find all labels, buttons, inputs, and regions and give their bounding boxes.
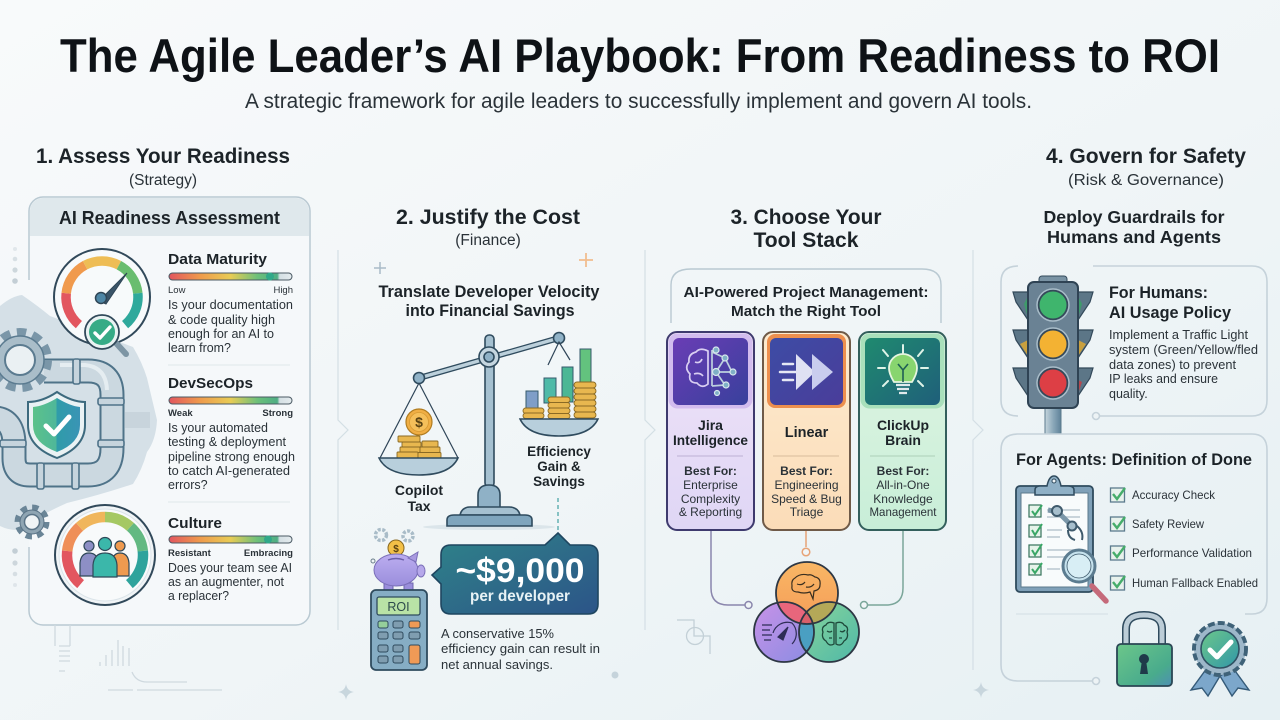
icon: piggy bank: $ — [393, 544, 399, 555]
left pan: copilot tax: Copilot — [395, 482, 443, 498]
icon: speedometer (left) — [762, 622, 796, 644]
left pan: copilot tax — [379, 383, 458, 514]
block: data maturity — [168, 252, 293, 355]
card: Jira Intelligence: Best For: — [684, 464, 737, 478]
block: devsecops — [168, 376, 295, 492]
block: data maturity: enough for an AI to — [168, 327, 274, 341]
block: devsecops: Strong — [262, 408, 293, 419]
checklist: Human Fallback Enabled — [1132, 576, 1258, 590]
panel header: AI Readiness Assessment — [59, 207, 280, 228]
subtitle: A strategic framework for agile leaders to successfully implement and govern AI tools. — [245, 90, 1032, 113]
right pan: efficiency gain: Efficiency — [527, 444, 591, 459]
block: devsecops: DevSecOps — [168, 376, 253, 392]
section 3 heading — [730, 206, 882, 252]
venn diagram — [754, 562, 859, 662]
block: culture: Resistant — [168, 548, 212, 559]
icon: traffic light — [1013, 276, 1093, 434]
card: ClickUp Brain: Brain — [885, 432, 921, 448]
section 4 heading — [1046, 145, 1246, 189]
robot arm — [1048, 506, 1082, 540]
icon: quality badge — [1191, 623, 1249, 696]
icon: AI brain network — [687, 347, 736, 396]
block: devsecops: pipeline strong enough — [168, 450, 295, 464]
panel: for humans — [1001, 266, 1267, 434]
callout: per developer savings — [432, 533, 598, 614]
card: Linear: Engineering — [774, 478, 839, 492]
savings note: efficiency gain can result in — [441, 641, 600, 656]
section 4 subheading: Deploy Guardrails for — [1044, 207, 1225, 227]
icon: ROI calculator — [371, 590, 427, 670]
right pan: efficiency gain: Gain & — [537, 459, 581, 474]
savings note — [441, 626, 600, 672]
section 1 heading: 1. Assess Your Readiness — [36, 145, 290, 168]
panel: for agents — [1001, 434, 1267, 684]
block: data maturity: Data Maturity — [168, 252, 267, 268]
section 1 heading: (Strategy) — [129, 172, 197, 189]
pipeline — [0, 365, 150, 475]
card: Linear: Best For: — [780, 464, 833, 478]
text: AI usage policy: quality. — [1109, 387, 1148, 401]
card: Jira Intelligence: Enterprise — [683, 478, 738, 492]
section 4 heading: 4. Govern for Safety — [1046, 145, 1246, 168]
checklist: Safety Review — [1132, 517, 1204, 531]
card: Linear — [763, 332, 850, 530]
card: ClickUp Brain: All-in-One — [876, 478, 930, 492]
block: data maturity: Low — [168, 285, 186, 296]
panel: for agents: For Agents: Definition of Done — [1016, 451, 1252, 469]
scale stand — [414, 332, 564, 526]
icon: small gear — [18, 508, 46, 536]
card: Jira Intelligence — [667, 332, 754, 530]
magnifier — [1092, 586, 1106, 601]
icon: clipboard checklist — [1016, 476, 1106, 601]
panel: tool match bracket — [671, 269, 941, 323]
text: AI usage policy — [1109, 284, 1258, 401]
section 4 heading: (Risk & Governance) — [1068, 172, 1224, 189]
left pan: copilot tax: Tax — [407, 498, 431, 514]
savings note: net annual savings. — [441, 657, 553, 672]
card: Linear: Triage — [790, 505, 824, 519]
card: Jira Intelligence: & Reporting — [679, 505, 742, 519]
block: devsecops: errors? — [168, 478, 208, 492]
icon: shield — [28, 392, 85, 458]
panel header — [30, 198, 309, 236]
chart: balance scale — [379, 332, 598, 530]
icon: brain (top) — [792, 574, 820, 599]
text: AI usage policy: data zones) to prevent — [1109, 358, 1237, 372]
block: culture: as an augmenter, not — [168, 575, 285, 589]
slider bar — [169, 536, 292, 544]
block: devsecops: testing & deployment — [168, 435, 287, 449]
icon: piggy bank — [371, 530, 425, 590]
icon: fast forward — [780, 354, 833, 390]
icon: large gear — [0, 333, 47, 387]
text: AI usage policy: AI Usage Policy — [1109, 304, 1232, 322]
section 2 subheading — [378, 283, 600, 320]
icon: brain (right) — [822, 622, 848, 645]
icon: ROI calculator: ROI — [387, 600, 410, 614]
icon: culture gauge — [55, 505, 155, 605]
icon: lightbulb — [878, 345, 928, 393]
card: Linear: Linear — [785, 425, 829, 441]
card: Jira Intelligence: Jira — [698, 417, 723, 433]
block: data maturity: High — [273, 285, 293, 296]
section 4 subheading: Humans and Agents — [1047, 227, 1221, 247]
panel: tool match bracket: Match the Right Tool — [731, 303, 881, 320]
card: ClickUp Brain: Best For: — [877, 464, 929, 478]
block: data maturity: learn from? — [168, 341, 231, 355]
block: devsecops: Is your automated — [168, 421, 268, 435]
text: AI usage policy: Implement a Traffic Light — [1109, 328, 1249, 342]
section 2 heading: 2. Justify the Cost — [396, 206, 580, 229]
card: Jira Intelligence: Complexity — [681, 492, 740, 506]
section 2 subheading: into Financial Savings — [406, 302, 574, 320]
block: culture — [168, 516, 293, 603]
card: Jira Intelligence: Intelligence — [673, 432, 748, 448]
block: data maturity: & code quality high — [168, 313, 275, 327]
title: The Agile Leader’s AI Playbook: From Readiness to ROI — [60, 29, 1220, 82]
slider bar — [169, 397, 292, 404]
block: devsecops: to catch AI-generated — [168, 464, 290, 478]
section 2 heading: (Finance) — [455, 232, 521, 249]
callout: per developer savings: ~$9,000 — [456, 552, 584, 590]
panel: AI readiness assessment — [0, 197, 310, 625]
right pan: efficiency gain — [520, 342, 598, 489]
block: data maturity: Is your documentation — [168, 298, 293, 312]
card: ClickUp Brain: ClickUp — [877, 417, 929, 433]
card: ClickUp Brain: Management — [870, 505, 937, 519]
card: Linear: Speed & Bug — [771, 492, 842, 506]
checklist: Performance Validation — [1132, 546, 1252, 560]
slider bar — [169, 272, 292, 280]
card: ClickUp Brain: Knowledge — [873, 492, 933, 506]
panel: tool match bracket: AI-Powered Project Management: — [684, 284, 928, 301]
left pan: copilot tax: $ — [415, 414, 423, 430]
savings note: A conservative 15% — [441, 626, 554, 641]
illustration: gear and pipeline backdrop — [0, 295, 157, 536]
right pan: efficiency gain: Savings — [533, 474, 585, 489]
card: ClickUp Brain — [859, 332, 946, 530]
text: AI usage policy: system (Green/Yellow/fled — [1109, 343, 1258, 357]
checklist — [1110, 488, 1258, 590]
section 3 heading: Tool Stack — [754, 229, 859, 252]
people group — [80, 538, 129, 577]
callout: per developer savings: per developer — [470, 588, 570, 605]
section 2 subheading: Translate Developer Velocity — [378, 283, 600, 301]
block: culture: Culture — [168, 516, 222, 532]
section 2 heading — [396, 206, 580, 249]
block: culture: a replacer? — [168, 589, 229, 603]
connectors to venn — [711, 531, 903, 608]
block: culture: Embracing — [244, 548, 293, 559]
section 4 subheading — [1044, 207, 1225, 247]
block: devsecops: Weak — [168, 408, 193, 419]
text: AI usage policy: For Humans: — [1109, 284, 1208, 302]
block: culture: Does your team see AI — [168, 561, 292, 575]
section 3 heading: 3. Choose Your — [730, 206, 882, 229]
section 1 heading — [36, 145, 290, 189]
text: AI usage policy: IP leaks and ensure — [1109, 372, 1218, 386]
checklist: Accuracy Check — [1132, 488, 1216, 502]
icon: padlock — [1117, 615, 1172, 686]
icon: data maturity gauge — [54, 249, 150, 354]
